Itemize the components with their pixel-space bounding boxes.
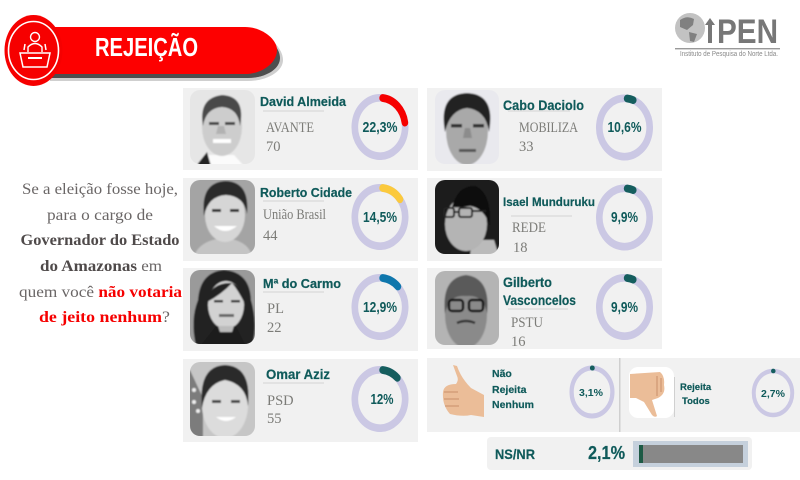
photo: Cabo Daciolo: [442, 92, 492, 164]
photo: David Almeida: [190, 90, 255, 164]
label: Rejeita Todos: Todos: [682, 396, 710, 407]
donut 12,9%: [352, 275, 408, 339]
panel: David Almeida: [183, 88, 418, 170]
party and number: MOBILIZA: [519, 120, 578, 136]
donut 12%: [352, 367, 408, 431]
donut 9,9%: [597, 275, 652, 339]
question text: Se a eleição fosse hoje,: [22, 181, 178, 198]
label: Não Rejeita Nenhum: Rejeita: [492, 384, 527, 396]
name: Roberto Cidade: [260, 185, 352, 200]
donut 3,1%: 3,1%: [579, 387, 604, 399]
photo: Gilberto Vasconcelos: [435, 271, 499, 345]
question text: do Amazonas em: [40, 258, 163, 275]
panel: Gilberto Vasconcelos: 16: [511, 334, 526, 350]
icon: thumbs down: [629, 367, 674, 418]
label: Não Rejeita Nenhum: Não: [492, 368, 512, 380]
panel: NS/NR: [487, 437, 752, 470]
panel: Cabo Daciolo: [427, 88, 662, 171]
donut 2,7%: 2,7%: [761, 388, 786, 400]
logo: IPEN: [675, 13, 780, 58]
question text: de jeito nenhum ?: [39, 309, 170, 326]
donut 12%: 12%: [370, 392, 394, 408]
name: Cabo Daciolo: [503, 97, 584, 113]
value 2,1%: 2,1%: [588, 443, 625, 463]
donut 9,9%: [597, 185, 652, 250]
donut 2,7%: [754, 371, 792, 415]
label: Não Rejeita Nenhum: Nenhum: [492, 399, 534, 411]
bar 2,1%: [633, 441, 748, 467]
donut 22,3%: [352, 95, 408, 159]
panel: David Almeida: 70: [266, 139, 280, 155]
donut 9,9%: 9,9%: [611, 300, 638, 316]
name: Omar Aziz: [266, 367, 330, 382]
icon: speaker at podium: [4, 15, 62, 86]
banner title: REJEIÇÃO: [95, 32, 198, 62]
panel: Isael Munduruku: 18: [513, 240, 528, 256]
label: Rejeita Todos: Rejeita: [680, 382, 712, 393]
question text: quem você não votaria: [19, 284, 182, 301]
party and number: AVANTE: [266, 120, 314, 136]
name: Mª do Carmo: [263, 276, 341, 291]
icon: thumbs up: [443, 365, 484, 417]
photo: Isael Munduruku: [435, 180, 499, 254]
donut 3,1%: [572, 368, 612, 416]
panel: Mª do Carmo: 22: [267, 320, 282, 336]
photo: Roberto Cidade: [190, 180, 255, 254]
panel: Omar Aziz: 55: [267, 411, 282, 427]
panel: Cabo Daciolo: 33: [519, 139, 534, 155]
logo: IPEN: Instituto de Pesquisa do Norte Ltda.: [680, 51, 778, 58]
party and number: PSTU: [511, 315, 543, 331]
name: Gilberto: [503, 275, 552, 290]
panel: Não Rejeita Nenhum and Rejeita Todos: [427, 358, 800, 432]
name: Vasconcelos: [503, 293, 576, 308]
name: Isael Munduruku: [503, 195, 595, 209]
donut 14,5%: 14,5%: [363, 210, 397, 226]
party and number: União Brasil: [263, 207, 326, 223]
photo: Omar Aziz: [190, 362, 255, 436]
panel: Gilberto Vasconcelos: [427, 268, 662, 350]
panel: Mª do Carmo: [183, 268, 418, 351]
donut 10,6%: 10,6%: [608, 120, 642, 136]
name: [503, 275, 576, 308]
label NS/NR: NS/NR: [495, 446, 535, 462]
donut 14,5%: [352, 185, 408, 249]
label: Não Rejeita Nenhum: [492, 368, 534, 411]
photo: Mª do Carmo: [190, 270, 255, 344]
party and number: PSD: [267, 393, 294, 409]
question text: para o cargo de: [47, 207, 153, 224]
donut 9,9%: 9,9%: [611, 210, 638, 226]
party and number: REDE: [512, 220, 546, 236]
panel: Roberto Cidade: [183, 178, 418, 261]
donut 22,3%: 22,3%: [362, 120, 398, 136]
question text: [19, 181, 182, 326]
donut 10,6%: [597, 95, 652, 160]
donut 12,9%: 12,9%: [363, 300, 397, 316]
panel: Isael Munduruku: [427, 178, 662, 261]
label: Rejeita Todos: [680, 382, 712, 407]
party and number: PL: [267, 301, 284, 317]
logo: IPEN: PEN: [717, 13, 778, 51]
name: David Almeida: [260, 94, 347, 109]
panel: Omar Aziz: [183, 359, 418, 442]
panel: Roberto Cidade: 44: [263, 228, 278, 244]
question text: Governador do Estado: [20, 232, 179, 249]
header banner: Rejeição: [4, 15, 283, 86]
